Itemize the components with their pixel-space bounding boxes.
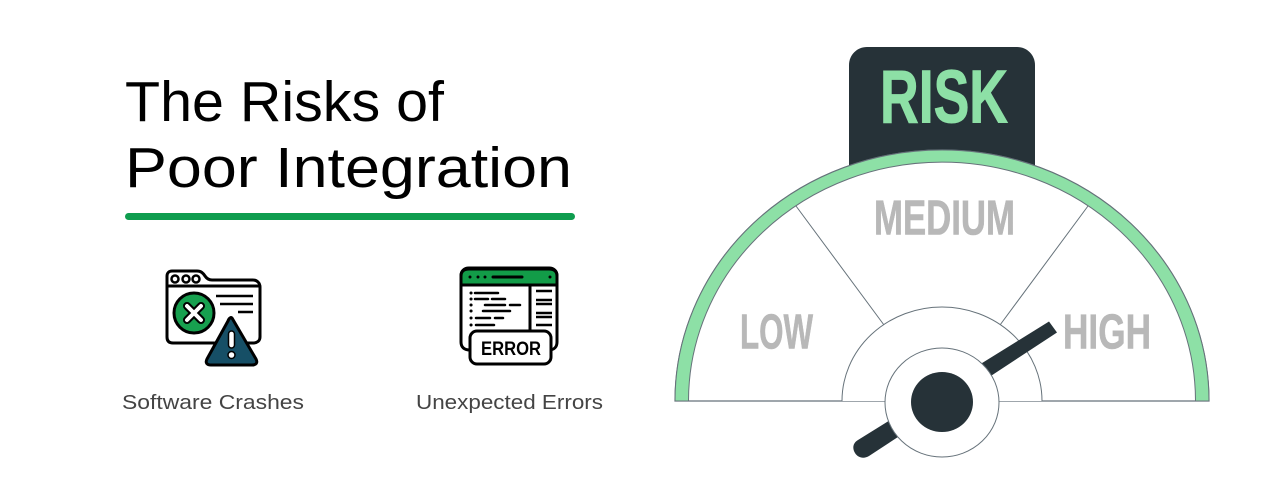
label: LOW: LOW	[740, 306, 813, 360]
label: MEDIUM: MEDIUM	[874, 192, 1015, 246]
label: Unexpected Errors: Unexpected Errors	[416, 392, 603, 414]
gauge face	[675, 150, 1209, 401]
needle hub ring	[885, 348, 999, 457]
inner arc	[842, 307, 1042, 401]
label: Software Crashes: Software Crashes	[122, 392, 304, 414]
icon: error window	[461, 268, 557, 364]
risk heading: RISK	[880, 54, 1008, 138]
title: Poor Integration	[125, 136, 572, 200]
needle hub	[911, 372, 973, 432]
gauge green rim	[675, 150, 1209, 401]
segment divider lines	[796, 206, 1088, 325]
title underline	[125, 213, 575, 220]
title	[125, 70, 572, 200]
title: The Risks of	[125, 70, 444, 134]
label: HIGH: HIGH	[1063, 306, 1151, 360]
needle	[853, 322, 1057, 458]
gauge	[675, 150, 1209, 458]
icon: error window: ERROR	[481, 339, 541, 360]
risk tab	[849, 47, 1035, 170]
icon: software crash window with warning	[167, 271, 260, 365]
